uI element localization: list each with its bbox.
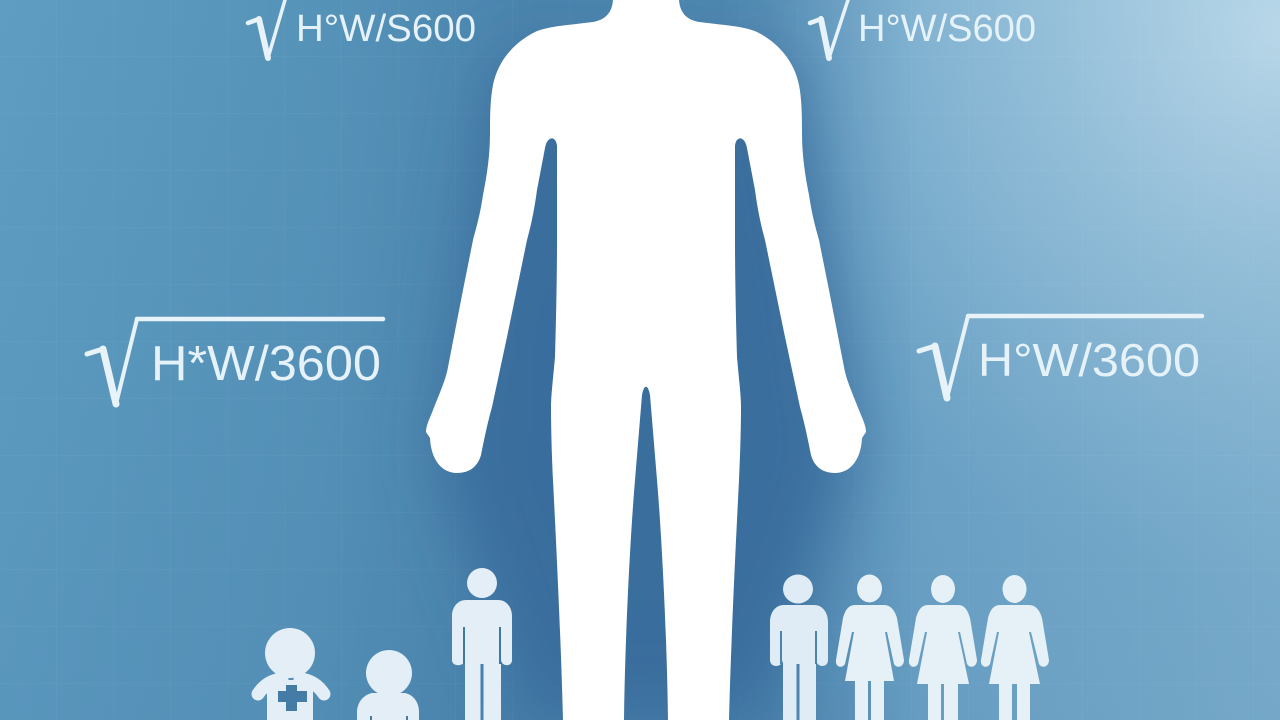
formula: middle left: H*W/3600: [151, 337, 381, 391]
formula: top right: H°W/S600: [858, 8, 1036, 50]
central figure shadow: [440, 60, 850, 720]
formula: middle right: H°W/3600: [978, 334, 1200, 386]
icon: adult man: [770, 574, 828, 720]
formula: top right: [810, 0, 1036, 58]
icon: woman 1: [836, 574, 904, 720]
formula: top left: H°W/S600: [296, 8, 476, 50]
formula: middle right: [919, 316, 1202, 398]
icon: baby with cross: [258, 628, 324, 720]
icon: woman 3: [981, 575, 1049, 720]
icon: child standing: [452, 568, 512, 720]
formula: top left: [248, 0, 476, 58]
icon: woman 2: [909, 575, 977, 720]
formula: middle left: [87, 319, 383, 404]
central human silhouette: [426, 0, 866, 720]
icon: toddler: [357, 650, 419, 720]
